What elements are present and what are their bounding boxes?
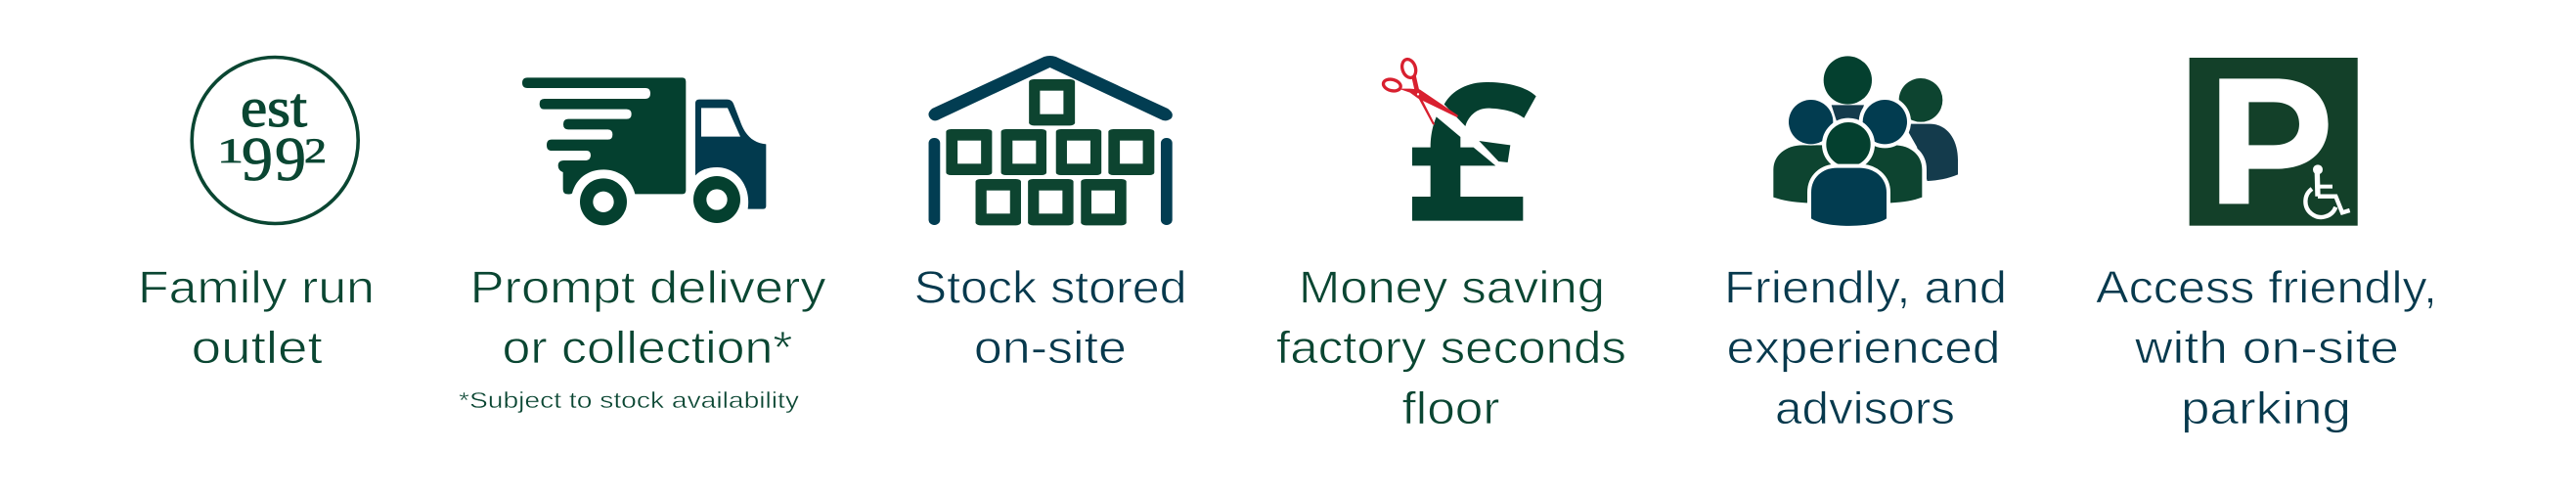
caption: family run outlet	[138, 262, 375, 373]
caption: stock stored on-site	[914, 262, 1187, 373]
caption: money saving factory seconds floor: Money saving	[1299, 262, 1605, 313]
icon: est 1992 roundel: 9	[275, 124, 306, 194]
icon: pound sign cut by scissors	[1382, 58, 1536, 221]
icon: wheelchair symbol	[2305, 164, 2350, 217]
icon: group of people	[1773, 56, 1958, 226]
caption: prompt delivery or collection	[470, 262, 826, 373]
caption: prompt delivery or collection: Prompt delivery	[470, 262, 826, 313]
feature: stock stored on-site	[914, 56, 1187, 373]
caption: access friendly with on-site parking	[2096, 262, 2437, 433]
caption: access friendly with on-site parking: Access friendly,	[2096, 262, 2437, 313]
caption: family run outlet: Family run	[138, 262, 375, 313]
icon: est 1992 roundel: est	[241, 77, 307, 139]
caption: friendly and experienced advisors	[1724, 262, 2007, 433]
feature: money saving factory seconds floor	[1276, 58, 1626, 433]
feature: family run outlet	[138, 57, 375, 373]
caption: friendly and experienced advisors: Friendly, and	[1724, 262, 2007, 313]
caption: money saving factory seconds floor	[1276, 262, 1626, 433]
icon: red scissors	[1382, 58, 1458, 124]
caption: stock stored on-site: on-site	[974, 322, 1127, 373]
caption: prompt delivery or collection: or collection*	[503, 322, 793, 373]
feature: friendly experienced advisors	[1724, 56, 2007, 433]
caption: money saving factory seconds floor: floor	[1402, 383, 1500, 433]
caption: access friendly with on-site parking: with on-site	[2134, 322, 2399, 373]
icon: est 1992 roundel: 1	[217, 131, 244, 170]
caption: access friendly with on-site parking: parking	[2181, 383, 2351, 433]
icon: est 1992 roundel	[192, 57, 358, 223]
icon: est 1992 roundel: 9	[242, 124, 273, 194]
feature: access friendly on-site parking	[2096, 58, 2437, 433]
icon: disabled parking sign	[2190, 58, 2358, 226]
feature: prompt delivery or collection	[459, 77, 826, 413]
icon: est 1992 roundel: 2	[304, 131, 327, 170]
caption: money saving factory seconds floor: factory seconds	[1276, 322, 1626, 373]
icon: warehouse with stacked boxes	[928, 56, 1173, 225]
footnote: subject to stock availability: *Subject to stock availability	[459, 387, 799, 413]
caption: friendly and experienced advisors: experienced	[1727, 322, 2001, 373]
caption: stock stored on-site: Stock stored	[914, 262, 1187, 313]
caption: friendly and experienced advisors: advisors	[1775, 383, 1955, 433]
caption: family run outlet: outlet	[192, 322, 323, 373]
icon: speeding delivery truck	[522, 77, 766, 225]
